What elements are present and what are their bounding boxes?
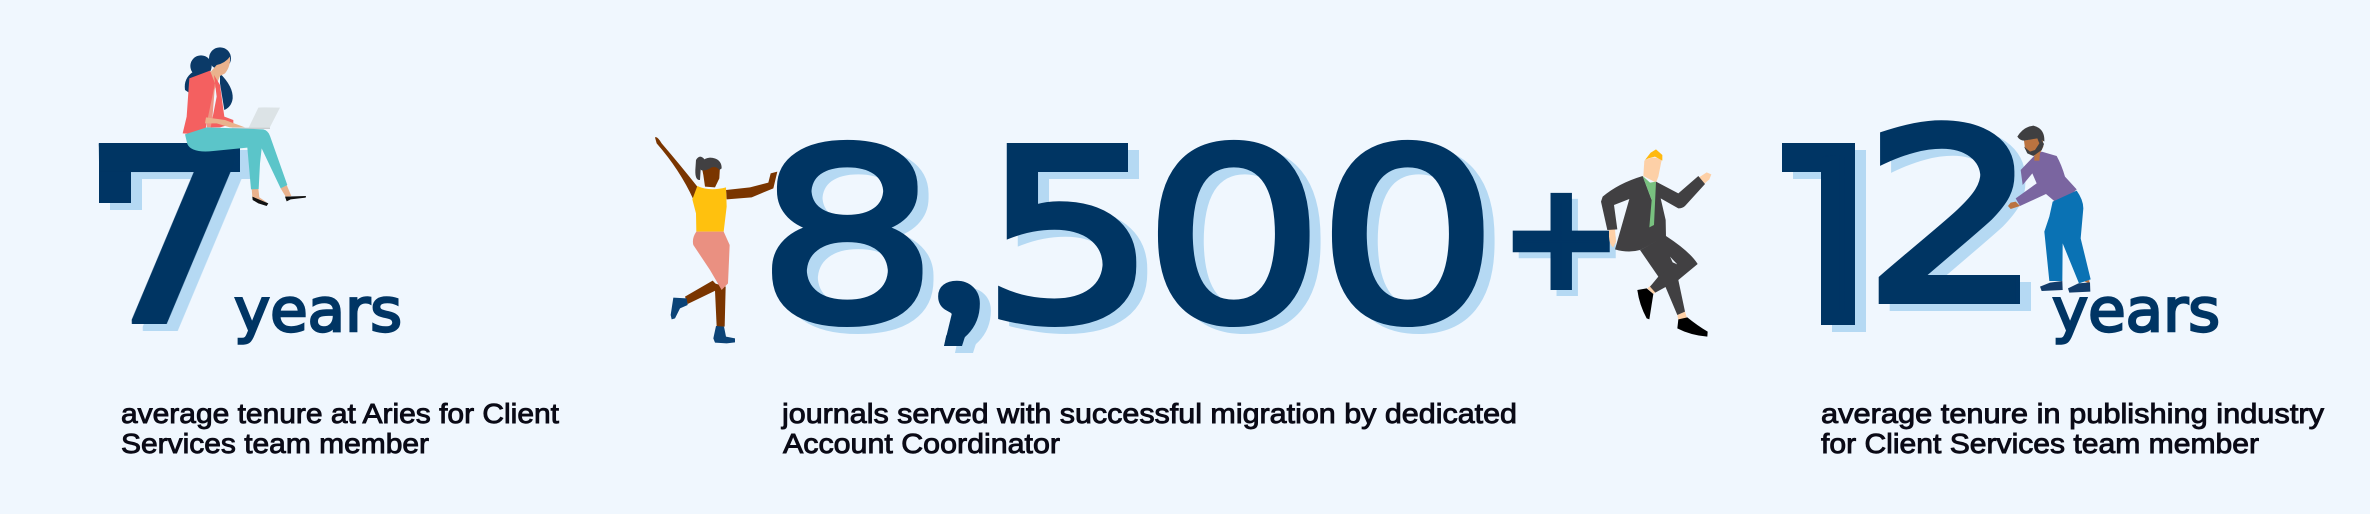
caption: tenure at Aries (121, 398, 559, 459)
numeral 8,500 (772, 140, 1495, 353)
label: years: years (2052, 276, 2220, 346)
numeral 12: 2 (1861, 82, 2041, 356)
icon: man pushing the 2 (2008, 126, 2091, 293)
plus sign: + (1503, 156, 1619, 318)
numeral 8,500: 0 (1142, 101, 1326, 376)
stat: 8,500+ journals (655, 137, 1712, 454)
numeral 8,500: 0 (1316, 101, 1500, 376)
numeral 8,500: 8 (756, 101, 939, 376)
caption: journals served: Account Coordinator (783, 428, 1060, 459)
numeral 12 (1782, 120, 2031, 332)
numeral 8,500: , (929, 102, 989, 368)
caption: journals served: journals served with successful migration by dedicated (781, 398, 1517, 429)
icon: woman sitting with laptop (183, 47, 306, 206)
numeral 12: 1 (1738, 98, 1937, 377)
caption: tenure in publishing (1821, 398, 2324, 459)
icon: man in suit running (1601, 149, 1711, 337)
numeral 8,500: 5 (980, 102, 1158, 376)
icon: woman dancing leaning on 8 (655, 137, 777, 343)
caption: tenure at Aries: Services team member (121, 428, 429, 459)
stat: 12 years (1782, 120, 2325, 454)
caption: tenure in publishing: average tenure in publishing industry (1821, 398, 2324, 429)
caption: journals served (781, 398, 1517, 459)
stat: 7 years (77, 47, 559, 459)
label: years: years (234, 276, 402, 346)
numeral 7: 7 (77, 101, 264, 375)
caption: tenure at Aries: average tenure at Aries for Client (121, 398, 559, 429)
caption: tenure in publishing: for Client Services team member (1821, 428, 2259, 459)
